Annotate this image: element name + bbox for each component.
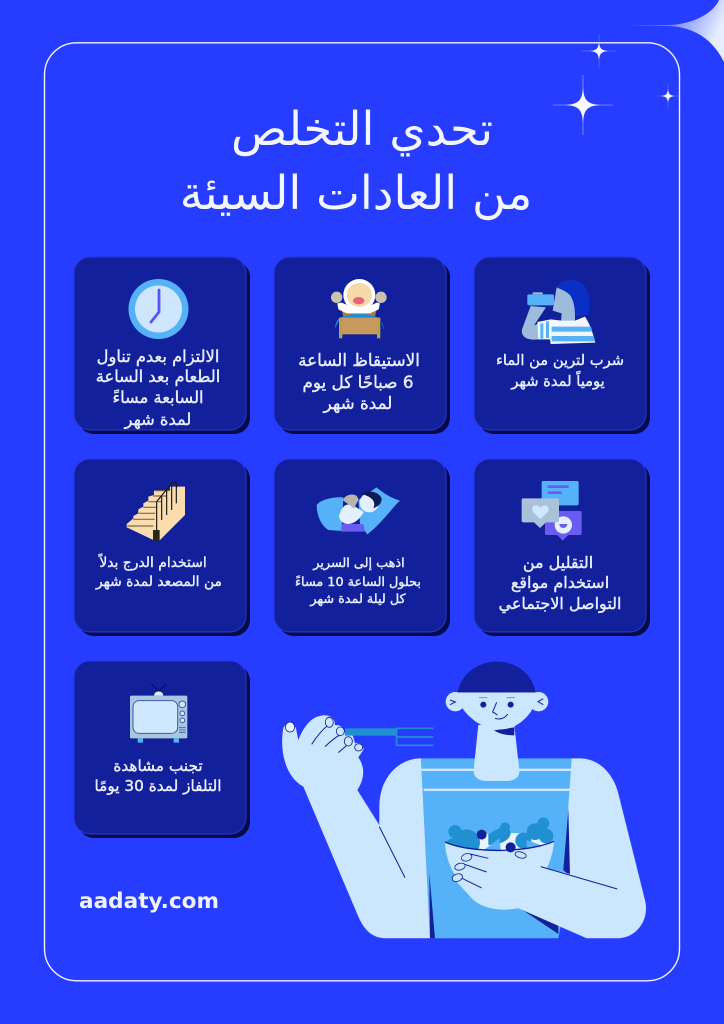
text: كل ليلة لمدة شهر [309, 592, 407, 607]
panel: television [74, 661, 250, 838]
text: استخدام الدرج بدلاً [98, 553, 207, 571]
text: التواصل الاجتماعي [499, 594, 621, 614]
text: استخدام مواقع [511, 573, 609, 593]
text: التلفاز لمدة 30 يومًا [94, 777, 222, 795]
icon: waking in bed [331, 279, 387, 338]
panel: social media [474, 459, 650, 636]
sparkles [553, 34, 681, 135]
icon: tv [130, 684, 187, 743]
panel: no food after seven [74, 257, 250, 434]
text [496, 352, 624, 390]
icon: staircase [127, 482, 185, 541]
text: يومياً لمدة شهر [510, 370, 605, 390]
neck and head [446, 662, 548, 781]
left arm and hand [282, 715, 430, 938]
text [298, 350, 420, 414]
panel: stairs [74, 459, 250, 636]
text [94, 757, 222, 795]
icon: clock [128, 279, 188, 339]
corner accent [631, 0, 724, 62]
panel: wake up [274, 257, 450, 434]
fork [345, 728, 433, 745]
salad bowl [445, 817, 554, 908]
text [95, 553, 222, 590]
text: الالتزام بعدم تناول [97, 347, 219, 367]
text: اذهب إلى السرير [312, 556, 405, 571]
text: الطعام بعد الساعة [96, 367, 220, 386]
text: شرب لترين من الماء [496, 352, 624, 369]
title [180, 102, 532, 221]
text [499, 553, 621, 614]
text: 6 صباحًا كل يوم [302, 372, 414, 392]
right arm and hand [451, 758, 646, 938]
text: الاستيقاظ الساعة [298, 350, 420, 370]
text: لمدة شهر [323, 393, 392, 414]
icon: sleeping person [317, 487, 400, 534]
shirt [421, 758, 572, 938]
website label: aadaty.com [79, 889, 219, 913]
text: التقليل من [523, 553, 593, 573]
icon: woman drinking [522, 280, 595, 344]
panel: sleep [274, 459, 450, 636]
text: تجنب مشاهدة [113, 757, 203, 775]
text: لمدة شهر [124, 410, 191, 430]
icon: chat bubbles [522, 481, 582, 541]
text [96, 347, 220, 430]
text [295, 556, 421, 607]
text: بحلول الساعة 10 مساءً [295, 575, 421, 590]
text: من المصعد لمدة شهر [95, 574, 222, 590]
title: من العادات السيئة [180, 166, 532, 221]
panel: drink water [474, 257, 650, 434]
title: تحدي التخلص [231, 102, 493, 157]
illustration: man eating salad [282, 662, 646, 938]
text: السابعة مساءً [112, 388, 204, 407]
